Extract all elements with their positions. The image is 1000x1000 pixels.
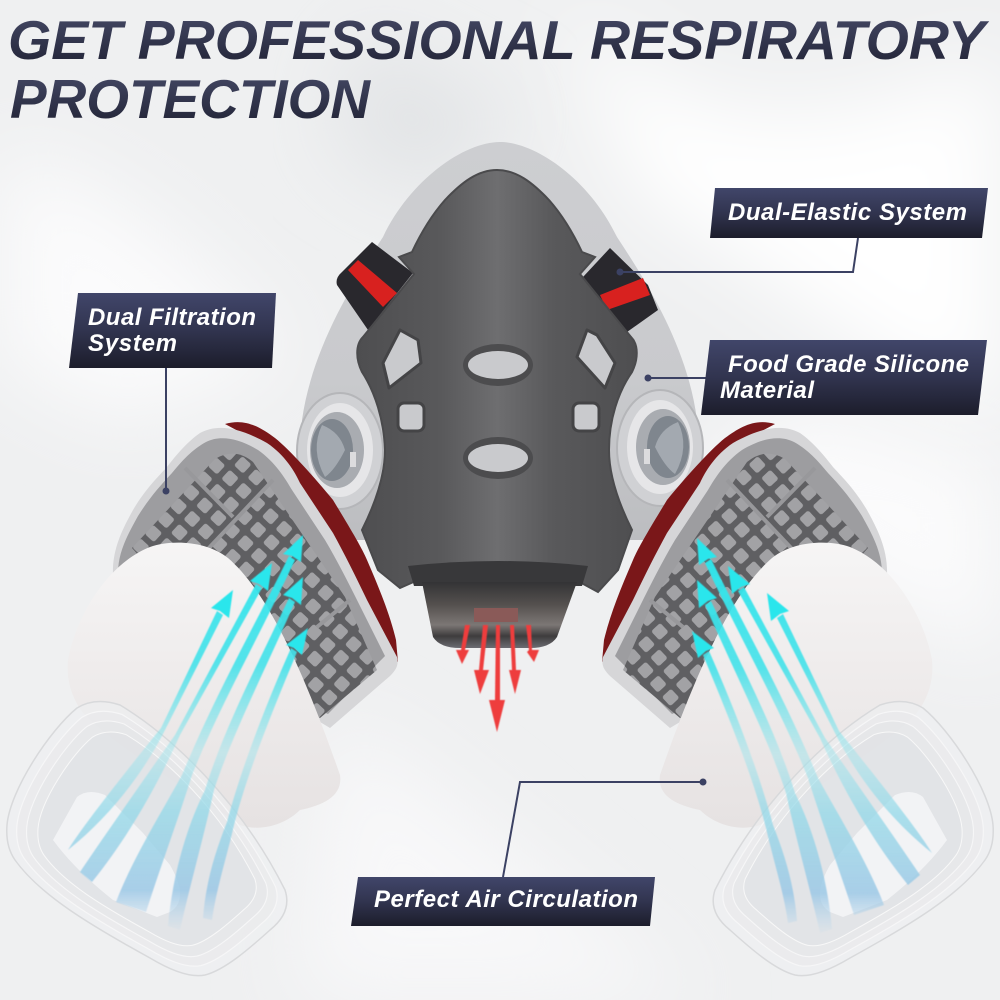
mask: silicone body (302, 142, 697, 540)
label: food grade silicone material: Material (720, 377, 815, 404)
callout leader: dual filtration (162, 368, 170, 494)
label: dual-elastic system (710, 188, 988, 238)
left head strap (337, 242, 413, 330)
callout leader: silicone (644, 374, 706, 382)
callout leader: dual-elastic (616, 238, 858, 276)
cyan intake arrows: right (692, 538, 932, 933)
callout leader: air circulation (503, 778, 706, 877)
mask: dark face plate (357, 170, 637, 592)
label: dual-elastic system: Dual-Elastic System (728, 199, 967, 226)
label: dual filtration system (69, 293, 276, 368)
label: dual filtration system: System (88, 330, 177, 357)
right inlet port (617, 390, 703, 506)
label: perfect air circulation: Perfect Air Circulation (374, 886, 638, 913)
label: perfect air circulation (351, 877, 655, 926)
title (8, 9, 989, 130)
label: dual filtration system: Dual Filtration (88, 304, 256, 331)
exhale valve (408, 561, 588, 648)
red exhaled air arrows (456, 625, 539, 732)
label: food grade silicone material (701, 340, 987, 415)
label: food grade silicone material: Food Grade Silicone (728, 351, 969, 378)
title: GET PROFESSIONAL RESPIRATORY (8, 9, 989, 71)
left filter cartridge (7, 422, 398, 976)
cyan intake arrows: left (68, 535, 308, 930)
right filter cartridge (602, 422, 993, 976)
left inlet port (297, 393, 383, 509)
title: PROTECTION (10, 68, 371, 130)
right head strap (583, 248, 658, 332)
